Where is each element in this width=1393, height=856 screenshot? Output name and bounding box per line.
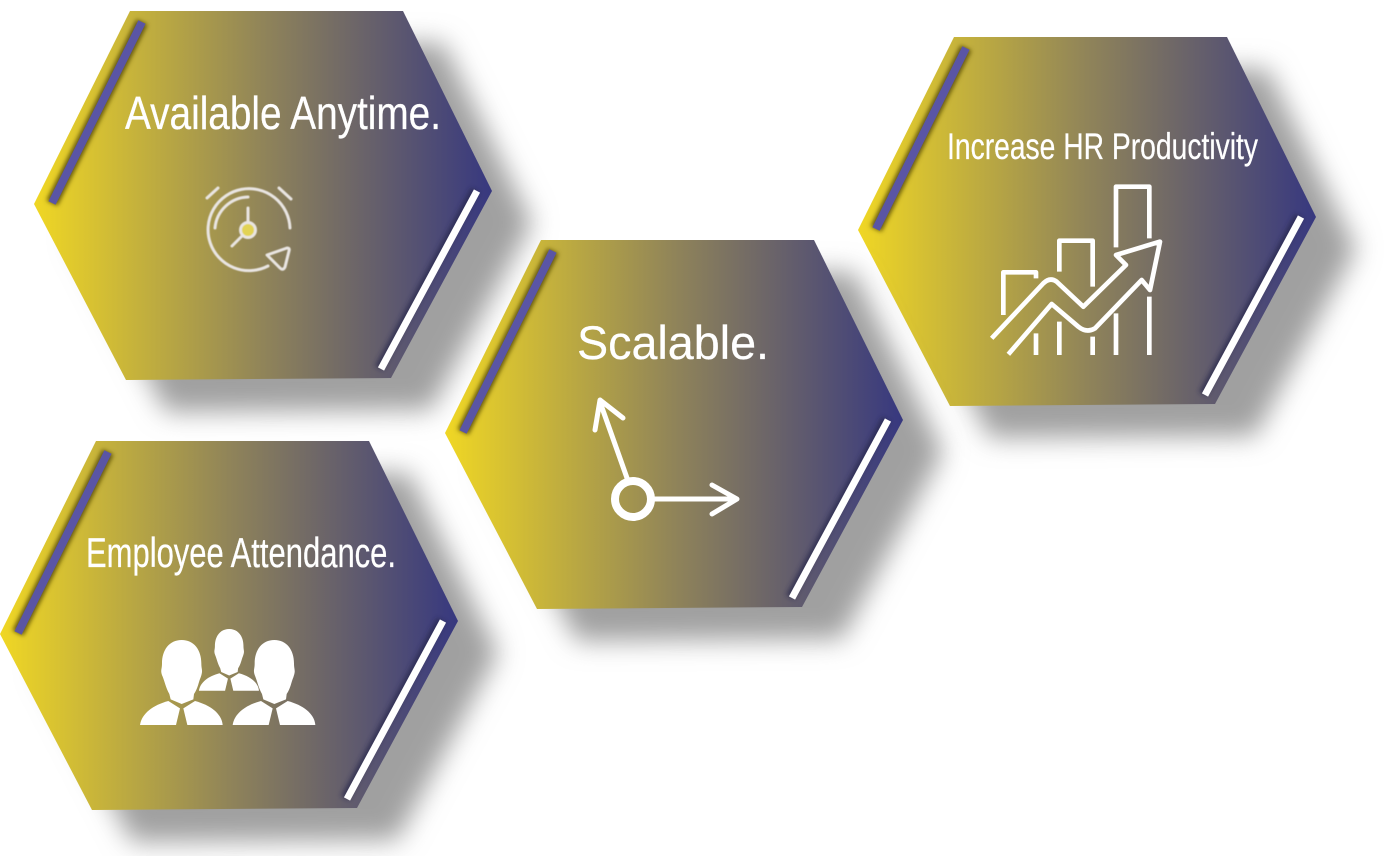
icon: clock with arrow <box>207 188 291 271</box>
hexagon shadow <box>74 43 532 412</box>
blue accent stripe <box>876 48 966 229</box>
blue accent stripe <box>463 251 553 432</box>
white accent stripe <box>345 620 443 799</box>
heading: available anytime: Available Anytime. <box>125 87 441 139</box>
white accent stripe <box>790 419 888 598</box>
blue accent stripe <box>18 452 108 633</box>
hexagon shadow <box>485 272 943 641</box>
hexagon shadow <box>898 69 1356 438</box>
white accent stripe <box>379 190 477 369</box>
hexagon body <box>34 11 492 380</box>
heading: scalable: Scalable. <box>577 316 769 369</box>
panel: increase hr productivity <box>858 37 1356 438</box>
icon: growth chart <box>992 187 1160 355</box>
hexagon body <box>0 441 458 810</box>
white accent stripe <box>1203 216 1301 395</box>
panel: available anytime <box>34 11 532 412</box>
panel: scalable <box>445 240 943 641</box>
hexagon body <box>858 37 1316 406</box>
hexagon body <box>445 240 903 609</box>
hexagon shadow <box>40 473 498 842</box>
icon: group of people <box>140 629 315 725</box>
blue accent stripe <box>52 22 142 203</box>
icon: scale axes arrows <box>595 400 737 517</box>
panel: employee attendance <box>0 441 498 842</box>
heading: employee attendance: Employee Attendance. <box>86 529 396 576</box>
heading: increase hr productivity: Increase HR Productivity <box>947 126 1258 167</box>
